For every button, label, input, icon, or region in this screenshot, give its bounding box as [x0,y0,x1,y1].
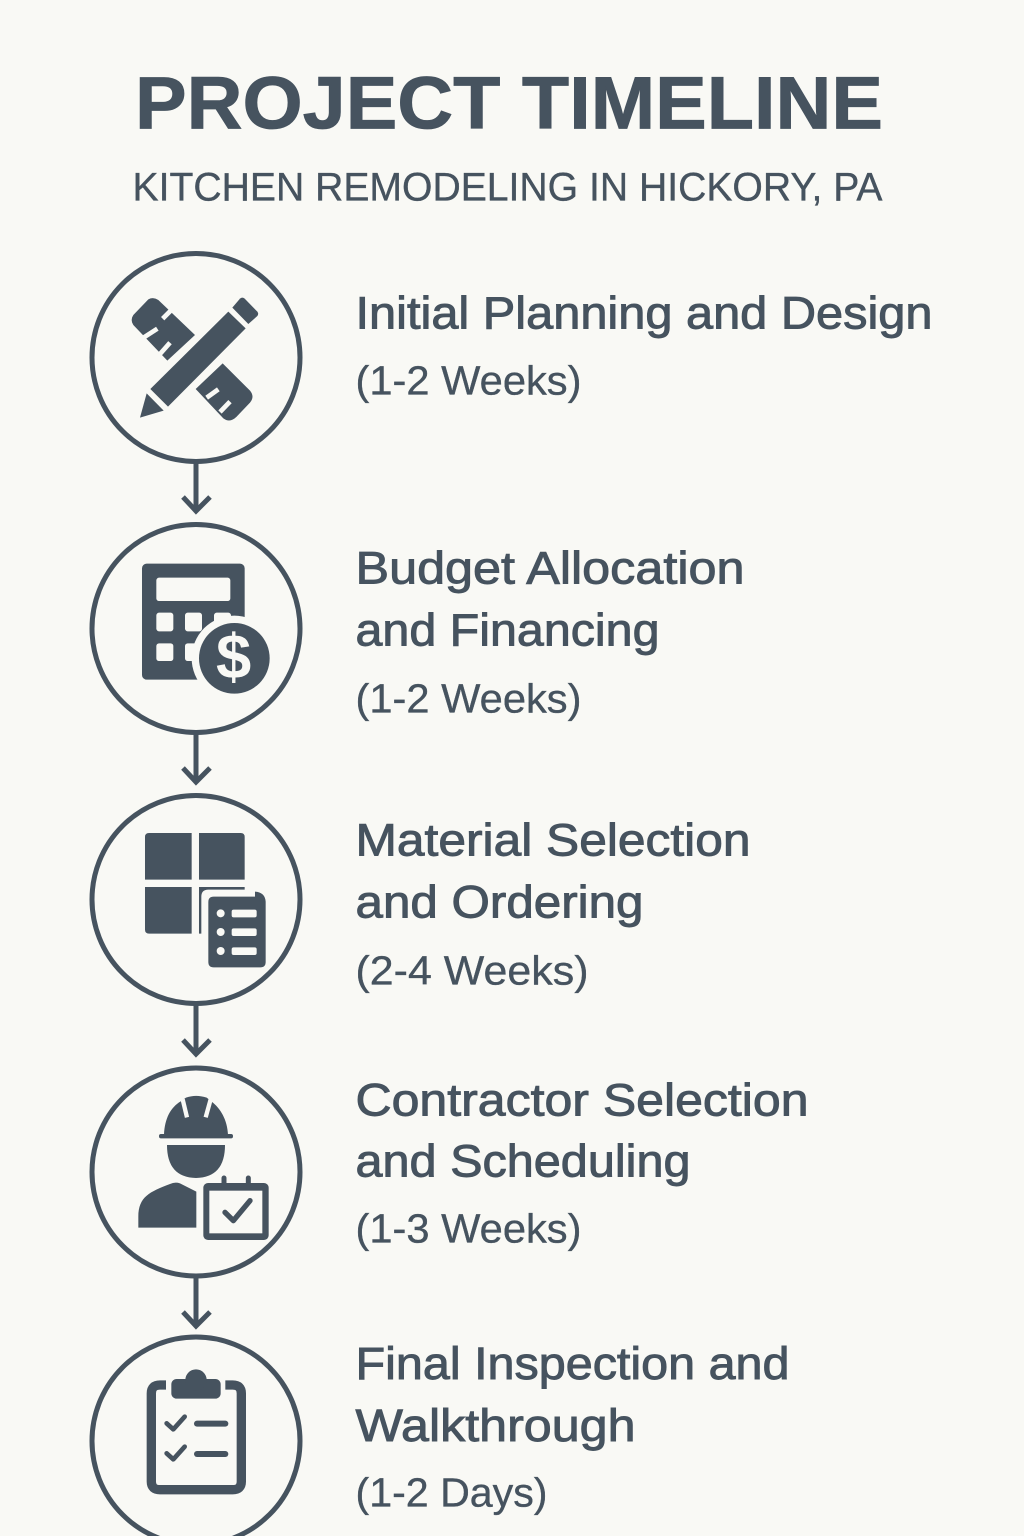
step 3 duration: (2-4 Weeks) [356,948,588,994]
step 1 heading: Initial Planning and Design [356,288,932,338]
arrow 2 [183,733,210,782]
step 5 heading: Final Inspection and [356,1338,790,1389]
step 3 heading: and Ordering [356,876,644,928]
icon circle: calculator and dollar coin: $ [216,623,251,693]
step 2 heading [356,542,744,656]
step 2 heading: Budget Allocation [356,542,744,594]
step 5 heading: Walkthrough [356,1400,636,1451]
arrow 3 [183,1004,210,1054]
step 2: budget allocation [92,524,744,782]
step 5 heading [356,1338,790,1451]
step 3 heading [356,814,750,928]
step 2 heading: and Financing [356,604,660,656]
step 1: initial planning [92,254,932,511]
step 5 duration: (1-2 Days) [356,1470,548,1516]
arrow 4 [183,1276,210,1326]
icon circle: worker and calendar [92,1068,300,1276]
step 3 heading: Material Selection [356,814,750,866]
title: PROJECT TIMELINE [135,62,883,144]
step 4 heading: and Scheduling [356,1136,690,1186]
subtitle: KITCHEN REMODELING IN HICKORY, PA [132,166,883,210]
step 1 duration: (1-2 Weeks) [356,358,582,404]
step 2 duration: (1-2 Weeks) [356,676,582,722]
icon circle: pencil and ruler [92,254,300,462]
step 3: material selection [92,796,750,1054]
step 4 duration: (1-3 Weeks) [356,1206,582,1252]
step 4: contractor selection [92,1068,808,1326]
icon circle: calculator and dollar coin [92,524,300,732]
icon circle: clipboard checklist [92,1337,300,1536]
step 5: final inspection [92,1337,790,1536]
step 4 heading [356,1074,808,1186]
icon circle: tiles and checklist [92,796,300,1004]
step 4 heading: Contractor Selection [356,1074,808,1126]
arrow 1 [183,461,210,511]
